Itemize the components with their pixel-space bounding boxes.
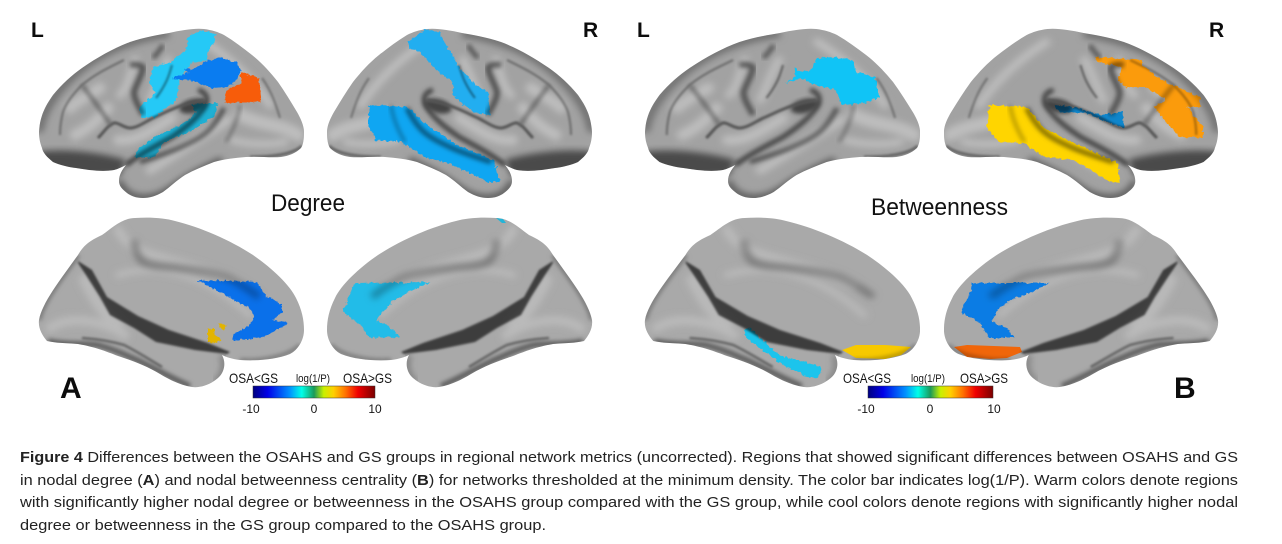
label: OSA greater than GS: OSA>GS (960, 370, 1008, 386)
region: precentral, blue (408, 30, 490, 115)
caption line 1: Figure 4 Differences between the OSAHS and GS groups in regional network metrics (uncorrected). Regions that showed significant differences between OSAHS and GS (20, 450, 1238, 466)
heading: Degree: Degree (271, 190, 345, 217)
colour bar legend, panel A (229, 370, 392, 416)
label: R, panel A: R (583, 19, 598, 42)
region: orbitofrontal, orange (954, 345, 1022, 359)
label: OSA less than GS: OSA<GS (229, 370, 278, 386)
panel B brain: right lateral surface (933, 20, 1227, 205)
region: frontal, orange (1095, 57, 1203, 138)
panel B brain: right medial surface (933, 210, 1227, 395)
panel B brain: left medial surface (636, 210, 931, 395)
colour bar (253, 386, 375, 398)
region: small dorsal spot (496, 218, 506, 223)
label: log(1/P): log(1/P) (296, 373, 330, 385)
region: insula, blue (1054, 105, 1124, 128)
region: medial frontal, blue (196, 280, 288, 340)
region: parahippocampal strip, cyan (744, 328, 822, 378)
panel letter A: A (60, 372, 82, 405)
label: L, panel B: L (637, 19, 650, 42)
region: inferior parietal, blue (172, 57, 241, 88)
panel A brain: left lateral surface (30, 20, 315, 205)
caption line 2: in nodal degree ( A) and nodal betweenness centrality ( B) for networks thresholded at the minimum density. The color bar indicates log(1/P). Warm colors denote regions (20, 473, 1238, 489)
tick label 10: 10 (987, 402, 1001, 416)
caption line 4: degree or betweenness in the GS group compared to the OSAHS group. (20, 518, 546, 534)
tick label -10: -10 (242, 402, 260, 416)
region: medial frontal, light blue (343, 282, 431, 338)
tick label -10: -10 (857, 402, 875, 416)
heading: Betweenness: Betweenness (871, 194, 1008, 221)
label: R, panel B: R (1209, 19, 1224, 42)
panel A brain: right lateral surface (316, 20, 601, 205)
panel A brain: left medial surface (30, 210, 315, 395)
label: OSA greater than GS: OSA>GS (343, 370, 392, 386)
panel letter B: B (1174, 372, 1196, 405)
region: temporal, yellow (987, 105, 1120, 183)
label: L, panel A: L (31, 19, 44, 42)
region: inferior parietal, cyan (785, 57, 879, 105)
region: medial frontal, blue (960, 283, 1050, 338)
region: orbitofrontal, yellow (842, 345, 911, 359)
caption line 3: with significantly higher nodal degree or betweenness in the OSAHS group compared with the GS group, while cool colors denote regions with significantly higher nodal (19, 495, 1238, 511)
label: log(1/P): log(1/P) (911, 373, 945, 385)
label: OSA less than GS: OSA<GS (843, 370, 891, 386)
panel A brain: right medial surface (316, 210, 601, 395)
figure caption (19, 450, 1238, 534)
region: subcallosal, yellow (208, 323, 227, 343)
region: supramarginal, orange (224, 72, 261, 103)
tick label 0: 0 (927, 402, 934, 416)
region: temporal, blue (369, 105, 500, 182)
region: precentral, light cyan (139, 31, 216, 118)
panel B brain: left lateral surface (636, 20, 931, 205)
tick label 0: 0 (311, 402, 318, 416)
colour bar (868, 386, 993, 398)
colour bar legend, panel B (843, 370, 1008, 416)
tick label 10: 10 (368, 402, 382, 416)
region: temporal, teal (135, 103, 218, 158)
